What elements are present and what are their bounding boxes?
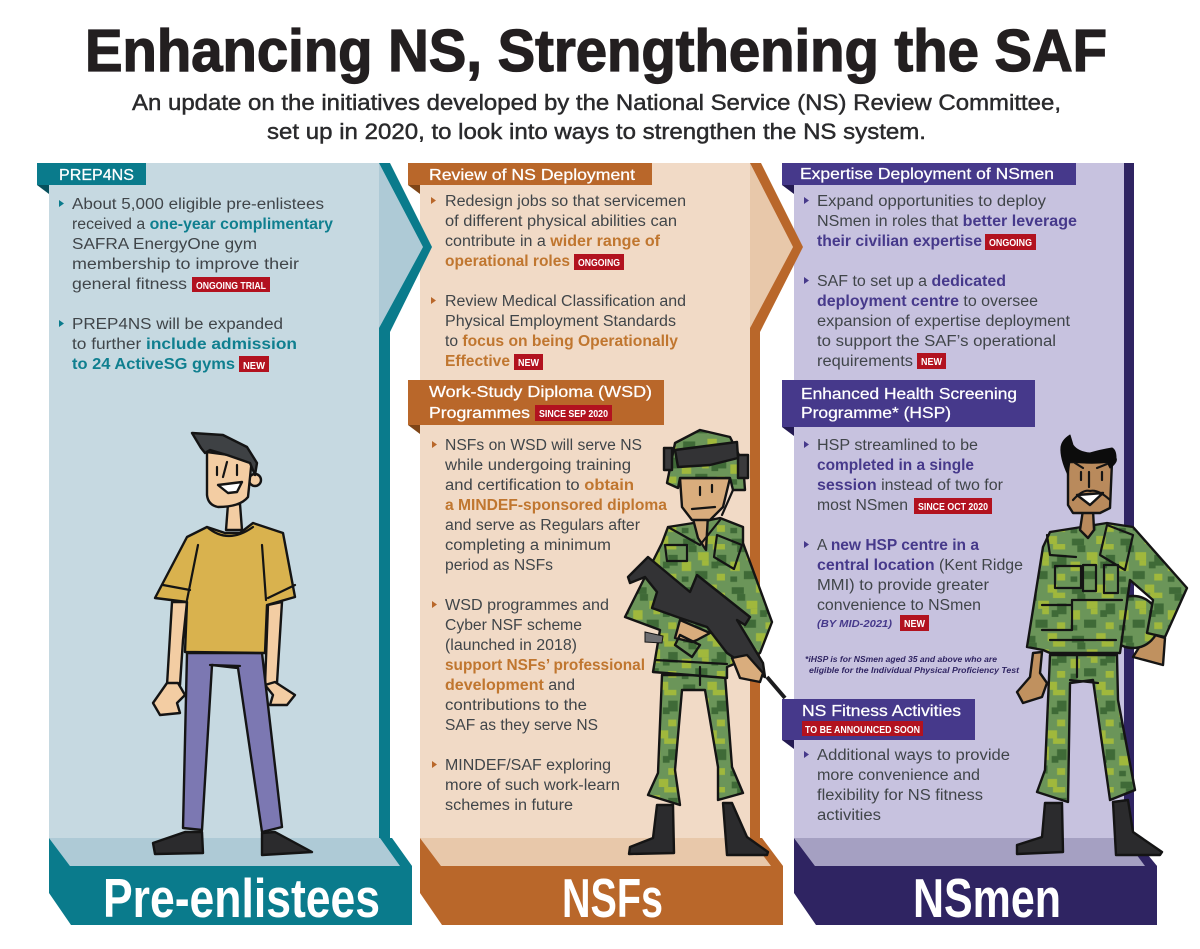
label: NSFs: NSFs — [562, 867, 663, 929]
label: NSmen: NSmen — [913, 867, 1061, 929]
text block: HSP points: A new HSP centre in a — [817, 537, 979, 554]
text block: expertise points: deployment centre to oversee — [817, 293, 1038, 310]
text block: HSP points: session instead of two for — [817, 477, 1003, 494]
text block: PREP4NS points: to further include admission — [72, 336, 297, 353]
heading: Work-Study Diploma Programmes: Programmes — [429, 405, 530, 422]
text block: deployment points: to focus on being Operationally — [445, 333, 678, 350]
text block: HSP points: convenience to NSmen — [817, 597, 981, 614]
heading: NS Fitness Activities — [782, 699, 975, 749]
heading: PREP4NS — [37, 163, 146, 194]
footnote — [805, 655, 1019, 675]
heading: Enhanced Health Screening Programme: Programme* (HSP) — [801, 405, 951, 422]
tag: ongoing — [985, 234, 1036, 250]
heading: Work-Study Diploma Programmes — [408, 380, 664, 434]
arrow: pre-enlistees to NSFs — [379, 163, 432, 838]
illustration: pre-enlistee figure — [153, 433, 312, 855]
tag: to be announced soon — [802, 721, 923, 736]
heading: Review of NS Deployment — [408, 163, 652, 194]
text block: PREP4NS points: membership to improve their — [72, 256, 299, 273]
text block: WSD points: schemes in future — [445, 797, 573, 814]
text block: deployment points — [431, 193, 686, 370]
text block: WSD points: while undergoing training — [444, 457, 631, 474]
text block: WSD points: WSD programmes and — [445, 597, 609, 614]
text block: WSD points: more of such work-learn — [445, 777, 620, 794]
tag: new: NEW — [518, 358, 539, 369]
subtitle: An update on the initiatives developed by the National Service (NS) Review Committee, — [132, 90, 1061, 115]
text block: WSD points: NSFs on WSD will serve NS — [445, 437, 642, 454]
text block: WSD points: (launched in 2018) — [445, 637, 577, 654]
tag: ongoing trial — [192, 277, 270, 292]
subtitle — [132, 90, 1061, 144]
panel: NSFs — [420, 163, 783, 929]
text block: PREP4NS points: general fitness — [72, 276, 187, 293]
label: Pre-enlistees: Pre-enlistees — [103, 867, 380, 929]
tag: since oct 2020 — [914, 498, 992, 514]
text block: HSP points: HSP streamlined to be — [817, 437, 978, 454]
text block: WSD points: MINDEF/SAF exploring — [445, 757, 611, 774]
heading: NS Fitness Activities: NS Fitness Activities — [802, 703, 961, 720]
text block: expertise points: NSmen in roles that better leverage — [817, 213, 1077, 230]
text block: PREP4NS points: PREP4NS will be expanded — [72, 316, 283, 333]
text block: PREP4NS points — [59, 196, 333, 373]
text block: PREP4NS points: About 5,000 eligible pre-enlistees — [72, 196, 324, 213]
text block: deployment points: Review Medical Classification and — [445, 293, 686, 310]
text block: WSD points: and certification to obtain — [445, 477, 634, 494]
title: Enhancing NS, Strengthening the SAF — [85, 18, 1107, 84]
text block: fitness points: more convenience and — [817, 767, 980, 784]
text block: HSP points: MMI) to provide greater — [817, 577, 989, 594]
tag: new — [917, 353, 946, 369]
panel: pre-enlistees — [49, 163, 412, 929]
tag: ongoing trial: ONGOING TRIAL — [196, 281, 266, 292]
subtitle: set up in 2020, to look into ways to strengthen the NS system. — [267, 119, 926, 144]
arrow: NSFs to NSmen — [750, 163, 803, 838]
tag: new — [514, 354, 543, 370]
text block: expertise points: to support the SAF’s operational — [817, 333, 1056, 350]
text block: HSP points: (BY MID-2021) — [817, 619, 893, 630]
text block: expertise points: expansion of expertise deployment — [817, 313, 1071, 330]
text block: HSP points: completed in a single — [817, 457, 974, 474]
text block: deployment points: contribute in a wider range of — [445, 233, 661, 250]
text block: WSD points: a MINDEF-sponsored diploma — [445, 497, 667, 514]
illustration: NSman soldier — [1017, 435, 1187, 855]
tag: ongoing — [574, 254, 624, 270]
tag: to be announced soon: TO BE ANNOUNCED SOON — [805, 725, 920, 736]
heading: Enhanced Health Screening Programme — [782, 380, 1035, 436]
text block: WSD points: development and — [445, 677, 575, 694]
tag: since oct 2020: SINCE OCT 2020 — [918, 502, 988, 513]
text block: PREP4NS points: received a one-year complimentary — [72, 216, 333, 233]
illustration: NSF soldier — [625, 430, 785, 855]
tag: new: NEW — [904, 619, 925, 630]
text block: expertise points — [804, 193, 1077, 370]
text block: deployment points: Physical Employment Standards — [445, 313, 676, 330]
text block: fitness points: activities — [817, 807, 881, 824]
heading: Expertise Deployment of NSmen: Expertise Deployment of NSmen — [800, 166, 1054, 183]
heading: Enhanced Health Screening Programme: Enhanced Health Screening — [801, 386, 1017, 403]
text block: HSP points: central location (Kent Ridge — [817, 557, 1023, 574]
text block: fitness points: Additional ways to provide — [817, 747, 1010, 764]
tag: new — [239, 356, 269, 372]
footnote: eligible for the Individual Physical Proficiency Test — [809, 666, 1019, 675]
heading: PREP4NS: PREP4NS — [59, 167, 134, 184]
tag: since sep 2020 — [535, 405, 612, 421]
heading: Review of NS Deployment: Review of NS Deployment — [429, 167, 636, 184]
heading: Work-Study Diploma Programmes: Work-Study Diploma (WSD) — [429, 384, 652, 401]
panel: NSmen — [794, 163, 1157, 929]
text block: expertise points: SAF to set up a dedicated — [817, 273, 1006, 290]
text block: PREP4NS points: SAFRA EnergyOne gym — [72, 236, 257, 253]
text block: deployment points: operational roles — [445, 253, 570, 270]
text block: WSD points: and serve as Regulars after — [445, 517, 640, 534]
tag: since sep 2020: SINCE SEP 2020 — [539, 409, 608, 420]
text block: expertise points: requirements — [817, 353, 913, 370]
text block: WSD points: period as NSFs — [445, 557, 553, 574]
text block: deployment points: of different physical abilities can — [445, 213, 677, 230]
text block: HSP points: most NSmen — [817, 497, 908, 514]
text block: WSD points: support NSFs’ professional — [445, 657, 645, 674]
tag: new: NEW — [921, 357, 942, 368]
text block: WSD points: contributions to the — [445, 697, 587, 714]
text block: deployment points: Effective — [445, 353, 510, 370]
text block: fitness points: flexibility for NS fitness — [817, 787, 983, 804]
text block: expertise points: Expand opportunities to deploy — [817, 193, 1046, 210]
text block: WSD points: SAF as they serve NS — [445, 717, 598, 734]
tag: ongoing: ONGOING — [989, 238, 1032, 249]
text block: WSD points: Cyber NSF scheme — [445, 617, 582, 634]
text block: expertise points: their civilian expertise — [817, 233, 982, 250]
heading: Expertise Deployment of NSmen — [782, 163, 1076, 194]
text block: WSD points — [432, 437, 667, 814]
tag: ongoing: ONGOING — [578, 258, 620, 269]
tag: new — [900, 615, 929, 631]
tag: new: NEW — [243, 361, 266, 372]
text block: WSD points: completing a minimum — [445, 537, 611, 554]
text block: PREP4NS points: to 24 ActiveSG gyms — [72, 356, 235, 373]
footnote: *iHSP is for NSmen aged 35 and above who are — [805, 655, 998, 664]
text block: deployment points: Redesign jobs so that servicemen — [445, 193, 686, 210]
text block: fitness points — [804, 747, 1010, 824]
text block: HSP points — [804, 437, 1023, 631]
